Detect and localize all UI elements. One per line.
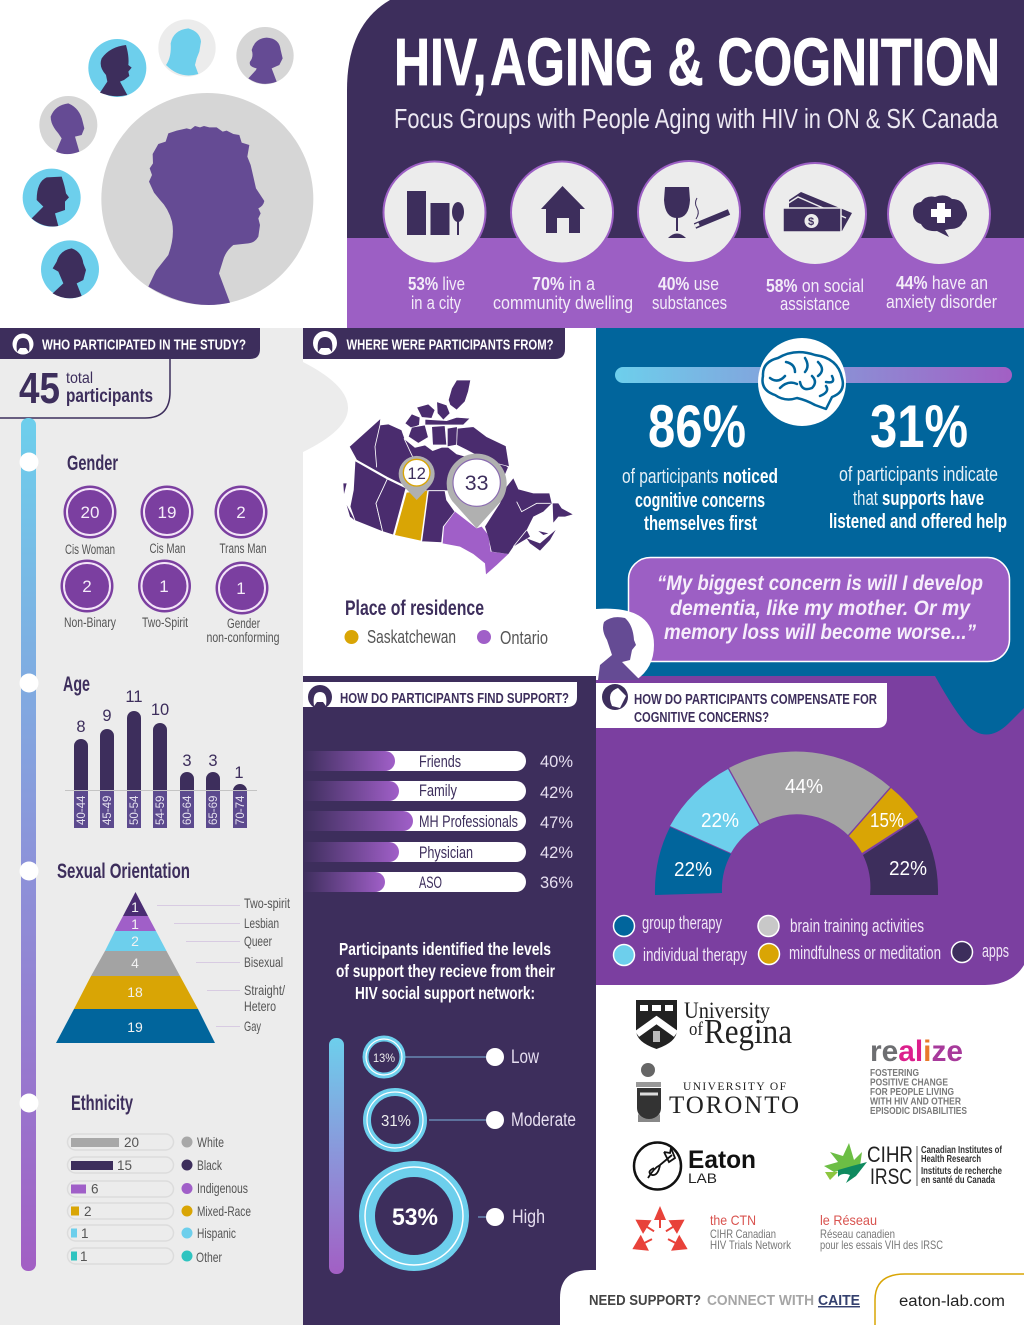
Saskatchewan	[395, 491, 427, 541]
age values: 8	[76, 718, 86, 736]
stat: anxiety disorder	[886, 163, 997, 312]
small portrait 2	[158, 19, 216, 77]
stat: social assistance: 58% on social	[766, 275, 864, 296]
stat: anxiety disorder: anxiety disorder	[886, 291, 997, 312]
western provinces	[350, 461, 455, 543]
pyramid leader lines and labels: Hetero	[244, 998, 276, 1014]
ethnicity: hispanic: Hispanic	[197, 1225, 236, 1241]
section tab: who participated	[0, 328, 260, 359]
bar: family	[303, 781, 573, 802]
bar: physician	[303, 842, 573, 862]
bar: physician: 42%	[540, 843, 573, 862]
small portrait 5	[23, 169, 81, 227]
logo: realize	[870, 1035, 967, 1117]
sexual orientation pyramid	[56, 860, 290, 1043]
bar: ASO	[303, 872, 573, 892]
level: high: 53%	[392, 1204, 438, 1231]
ethnicity: indigenous	[68, 1180, 248, 1197]
stat: 86%: of participants noticed	[622, 466, 778, 488]
section tab: where were participants from	[303, 328, 565, 359]
level: high	[365, 1167, 545, 1265]
ethnicity: hispanic: 1	[81, 1226, 89, 1241]
total participants box	[0, 359, 170, 418]
pyramid values: 2	[131, 933, 139, 949]
age bar chart: 50-54	[129, 795, 141, 825]
bar: mental health professionals	[303, 811, 573, 832]
gender: cis man: Cis Man	[150, 541, 186, 556]
age bar chart: 65-69	[208, 796, 220, 825]
level: moderate	[367, 1092, 576, 1148]
level: moderate: 31%	[381, 1113, 411, 1130]
support bar chart	[303, 751, 573, 892]
footer support line: CAITE	[818, 1293, 860, 1309]
logo: realize: realize	[870, 1035, 963, 1068]
age bar chart: 54-59	[155, 796, 167, 825]
small portrait 3	[236, 27, 294, 84]
ethnicity: other: 1	[80, 1249, 88, 1264]
gender: two-spirit	[138, 560, 191, 630]
logo: realize: WITH HIV AND OTHER	[870, 1096, 961, 1108]
gender: non-binary: Non-Binary	[64, 615, 116, 630]
stat: substances: substances	[652, 292, 727, 313]
level: low	[366, 1038, 539, 1076]
donut legend: group therapy	[642, 913, 722, 933]
level: low: Low	[511, 1047, 539, 1068]
bar: ASO: 36%	[540, 873, 573, 892]
logo: the CTN text: the CTN	[710, 1212, 756, 1228]
stat: 86%: 86%	[648, 393, 746, 460]
stat: lives in a city	[384, 162, 486, 313]
segment: apps	[863, 819, 938, 895]
white territory boundaries	[375, 425, 413, 467]
pyramid leader lines and labels: Lesbian	[244, 915, 279, 931]
place of residence legend: Saskatchewan	[367, 627, 456, 647]
ethnicity: mixed-race: 2	[84, 1204, 92, 1219]
logo: realize: FOR PEOPLE LIVING	[870, 1086, 954, 1098]
bar: family: Family	[419, 781, 457, 800]
stat: 31%	[829, 393, 1007, 533]
ethnicity: black: Black	[197, 1157, 223, 1173]
stat: community dwelling	[493, 162, 633, 313]
logo: CIHR IRSC: IRSC	[870, 1164, 912, 1189]
panel: left column background	[0, 328, 303, 1325]
gender: two-spirit: 1	[159, 577, 169, 596]
northern territories and islands	[343, 380, 509, 521]
donut legend: individual therapy	[643, 945, 747, 965]
pyramid values: 1	[131, 899, 139, 915]
bar: physician: Physician	[419, 843, 473, 862]
gender: cis woman: 20	[81, 503, 99, 522]
section tab: find support	[303, 682, 577, 709]
eastern provinces	[485, 478, 573, 554]
gender: cis man	[140, 486, 194, 556]
panel: map background	[303, 328, 596, 676]
bar: mental health professionals: 47%	[540, 813, 573, 832]
age bar chart: 70-74	[235, 795, 247, 825]
logo: CIHR IRSC: en santé du Canada	[921, 1175, 995, 1186]
logo: the CTN text	[710, 1212, 792, 1252]
gender: non-binary	[60, 560, 116, 630]
age bar labels	[74, 790, 247, 828]
ethnicity: indigenous: 6	[91, 1182, 99, 1196]
section tab: compensate: HOW DO PARTICIPANTS COMPENSATE FOR	[634, 692, 877, 708]
gender section	[60, 452, 280, 645]
age heading: Age	[63, 673, 90, 696]
bar: ASO: ASO	[419, 873, 442, 892]
bar: family: 42%	[540, 783, 573, 802]
logo: Eaton Lab: LAB	[688, 1170, 717, 1186]
gender heading: Gender	[67, 452, 118, 475]
place of residence legend: Ontario	[500, 628, 548, 648]
logo: le Réseau text: pour les essais VIH des IRSC	[820, 1238, 943, 1252]
level: high: High	[512, 1207, 545, 1228]
place of residence legend	[344, 597, 548, 648]
age values: 9	[102, 707, 112, 725]
stat: social assistance	[764, 163, 866, 314]
footer notch	[560, 1270, 1024, 1325]
logo: the CTN text: HIV Trials Network	[710, 1238, 792, 1252]
stat: substances: 40% use	[658, 273, 719, 294]
logo: realize: EPISODIC DISABILITIES	[870, 1105, 967, 1117]
logo: le Réseau text: le Réseau	[820, 1212, 877, 1228]
age values: 3	[208, 752, 218, 770]
gender: trans man: Trans Man	[220, 541, 266, 556]
pyramid leader lines and labels: Bisexual	[244, 954, 283, 970]
section tab: find support: HOW DO PARTICIPANTS FIND SUPPORT?	[340, 691, 569, 707]
bar: friends	[303, 751, 573, 771]
segment: mindfulness	[849, 788, 918, 853]
gender: trans man	[214, 486, 268, 556]
pyramid leader lines and labels	[157, 895, 290, 1034]
logo: the CTN text: CIHR Canadian	[710, 1227, 776, 1241]
map of Canada	[343, 380, 573, 574]
logo: CIHR IRSC: Health Research	[921, 1154, 981, 1165]
donut legend: apps	[982, 941, 1009, 961]
ethnicity: black: 15	[117, 1158, 132, 1173]
total participants box: 45	[19, 364, 60, 413]
age values: 11	[125, 688, 143, 706]
gender: non-conforming: non-conforming	[206, 630, 280, 645]
segment: group therapy	[655, 827, 731, 895]
stat: community dwelling: community dwelling	[493, 292, 633, 313]
ethnicity: black	[68, 1157, 223, 1173]
section tab: where were participants from: WHERE WERE PARTICIPANTS FROM?	[346, 338, 554, 354]
pyramid leader lines and labels: Gay	[244, 1018, 261, 1034]
donut values: 44%	[785, 776, 823, 798]
logo: University of Toronto: UNIVERSITY OF	[683, 1081, 786, 1093]
stat: social assistance: assistance	[780, 293, 850, 314]
pyramid values: 1	[131, 916, 139, 932]
logo: le Réseau text	[820, 1212, 943, 1252]
section tab: who participated: WHO PARTICIPATED IN THE STUDY?	[42, 338, 246, 354]
pin: Ontario	[447, 454, 507, 528]
footer support line: CONNECT WITH	[707, 1293, 814, 1309]
large portrait	[101, 93, 313, 305]
stat: anxiety disorder: 44% have an	[896, 272, 988, 293]
gender: cis man: 19	[158, 503, 176, 522]
website box	[875, 1274, 1024, 1325]
support levels heading: HIV social support network:	[355, 983, 535, 1003]
gender: non-binary: 2	[82, 577, 92, 596]
level: moderate: Moderate	[511, 1110, 576, 1131]
total participants box: participants	[66, 385, 153, 407]
level: low: 13%	[373, 1051, 395, 1065]
donut legend	[614, 913, 1009, 966]
ethnicity heading: Ethnicity	[71, 1092, 133, 1115]
Ontario	[443, 512, 508, 574]
place of residence legend: Place of residence	[345, 597, 484, 620]
footer support line: NEED SUPPORT?	[589, 1293, 701, 1309]
pyramid layers	[56, 892, 215, 1043]
pyramid leader lines and labels: Two-spirit	[244, 895, 290, 911]
quote box: “My biggest concern is will I develop	[657, 571, 983, 595]
timeline bar	[20, 418, 38, 1271]
donut values: 15%	[870, 810, 904, 832]
logo: CIHR IRSC: Instituts de recherche	[921, 1166, 1002, 1177]
logo: University of Toronto: TORONTO	[669, 1092, 799, 1119]
donut values: 22%	[701, 810, 739, 832]
stat: 86%: themselves first	[644, 513, 757, 535]
gender: cis woman: Cis Woman	[65, 542, 115, 557]
gender: trans man: 2	[236, 503, 246, 522]
segment: individual therapy	[670, 769, 759, 853]
gender: cis woman	[64, 486, 116, 557]
logo: realize: POSITIVE CHANGE	[870, 1076, 948, 1088]
segment: brain training	[729, 751, 890, 835]
age values: 10	[151, 701, 169, 719]
age values: 1	[234, 764, 244, 782]
stat: 31%: 31%	[870, 393, 968, 460]
bar: friends: 40%	[540, 752, 573, 771]
pyramid values	[127, 899, 143, 1035]
ethnicity: mixed-race	[68, 1203, 251, 1219]
pin: Saskatchewan: 12	[407, 464, 426, 483]
portrait silhouettes	[23, 19, 313, 305]
pin: Ontario: 33	[465, 471, 489, 495]
ethnicity chart	[68, 1092, 251, 1265]
age values: 3	[182, 752, 192, 770]
website box: eaton-lab.com	[899, 1293, 1005, 1310]
small portrait 1	[88, 39, 146, 97]
age bar chart: 40-44	[76, 795, 88, 825]
stat: lives in a city: 53% live	[408, 273, 465, 294]
panel: support background	[303, 676, 596, 1325]
quote portrait	[596, 609, 654, 680]
panel: cognitive concerns background	[596, 328, 1024, 748]
section tab: compensate: COGNITIVE CONCERNS?	[634, 710, 769, 726]
bar: mental health professionals: MH Professionals	[419, 812, 518, 831]
quote box: dementia, like my mother. Or my	[670, 596, 971, 620]
footer support line	[589, 1293, 860, 1309]
total participants box: total	[66, 370, 93, 387]
stat: community dwelling: 70% in a	[532, 273, 596, 294]
ethnicity: other	[68, 1248, 222, 1265]
ethnicity: white	[68, 1134, 224, 1150]
support levels heading: of support they recieve from their	[336, 961, 555, 981]
logo: University of Regina: of	[689, 1019, 704, 1040]
donut values: 22%	[889, 858, 927, 880]
stat: 86%: cognitive concerns	[635, 490, 765, 512]
logo: University of Toronto	[636, 1063, 799, 1122]
quote box	[628, 558, 1010, 662]
header banner	[347, 0, 1024, 328]
age bar chart: 60-64	[182, 795, 194, 825]
pyramid values: 18	[127, 984, 143, 1000]
ethnicity: other: Other	[196, 1249, 222, 1265]
gender: non-conforming: 1	[236, 579, 246, 598]
stat: social assistance: $	[808, 216, 814, 228]
logo: CIHR IRSC: Canadian Institutes of	[921, 1145, 1003, 1156]
bar: friends: Friends	[419, 752, 461, 771]
stat: lives in a city: in a city	[411, 292, 462, 313]
stat: substances	[638, 161, 740, 313]
small portrait 6	[41, 240, 99, 298]
gender: non-conforming	[206, 562, 280, 645]
gradient bar and brain icon	[615, 338, 1012, 426]
support levels heading: Participants identified the levels	[339, 939, 551, 959]
age bar chart	[63, 673, 257, 828]
pyramid leader lines and labels: Straight/	[244, 982, 285, 998]
logo: le Réseau text: Réseau canadien	[820, 1227, 895, 1241]
pin: Saskatchewan	[399, 456, 435, 500]
panel: compensation background	[596, 676, 1024, 985]
donut legend: brain training activities	[790, 916, 924, 936]
quote box: memory loss will become worse...”	[664, 620, 976, 644]
sexual orientation heading: Sexual Orientation	[57, 860, 190, 883]
ethnicity: indigenous: Indigenous	[197, 1180, 248, 1196]
stat: 86%	[622, 393, 778, 535]
age bars	[74, 711, 247, 791]
logo: Eaton Lab: Eaton	[688, 1146, 756, 1174]
logo: CIHR IRSC: CIHR	[867, 1142, 913, 1167]
semicircle donut chart	[655, 751, 938, 895]
support levels heading	[336, 939, 555, 1003]
pyramid values: 19	[127, 1019, 143, 1035]
pyramid leader lines and labels: Queer	[244, 933, 272, 949]
age values	[76, 688, 244, 782]
ethnicity: hispanic	[68, 1225, 236, 1241]
donut legend: mindfulness or meditation	[789, 943, 941, 963]
logo: CIHR IRSC	[824, 1142, 1003, 1189]
logo: University of Regina	[636, 998, 792, 1051]
support levels chart	[329, 1038, 576, 1274]
small portrait 4	[39, 96, 97, 154]
logo: University of Regina: University	[684, 998, 770, 1023]
logo: University of Regina: Regina	[704, 1012, 792, 1051]
stat: 31%: that supports have	[853, 488, 984, 510]
gender: non-conforming: Gender	[227, 616, 260, 631]
donut values	[674, 776, 927, 881]
ethnicity: white: 20	[124, 1135, 139, 1150]
pyramid values: 4	[131, 955, 139, 971]
section tab: compensate	[596, 683, 887, 728]
age bar chart: 45-49	[102, 796, 114, 825]
ethnicity: white: White	[197, 1134, 224, 1150]
gender: two-spirit: Two-Spirit	[142, 615, 188, 630]
logo: Eaton Lab	[634, 1142, 756, 1190]
donut values: 22%	[674, 859, 712, 881]
logo: CTN arrows	[628, 1206, 692, 1257]
logo: realize: FOSTERING	[870, 1067, 919, 1079]
ethnicity: mixed-race: Mixed-Race	[197, 1203, 251, 1219]
